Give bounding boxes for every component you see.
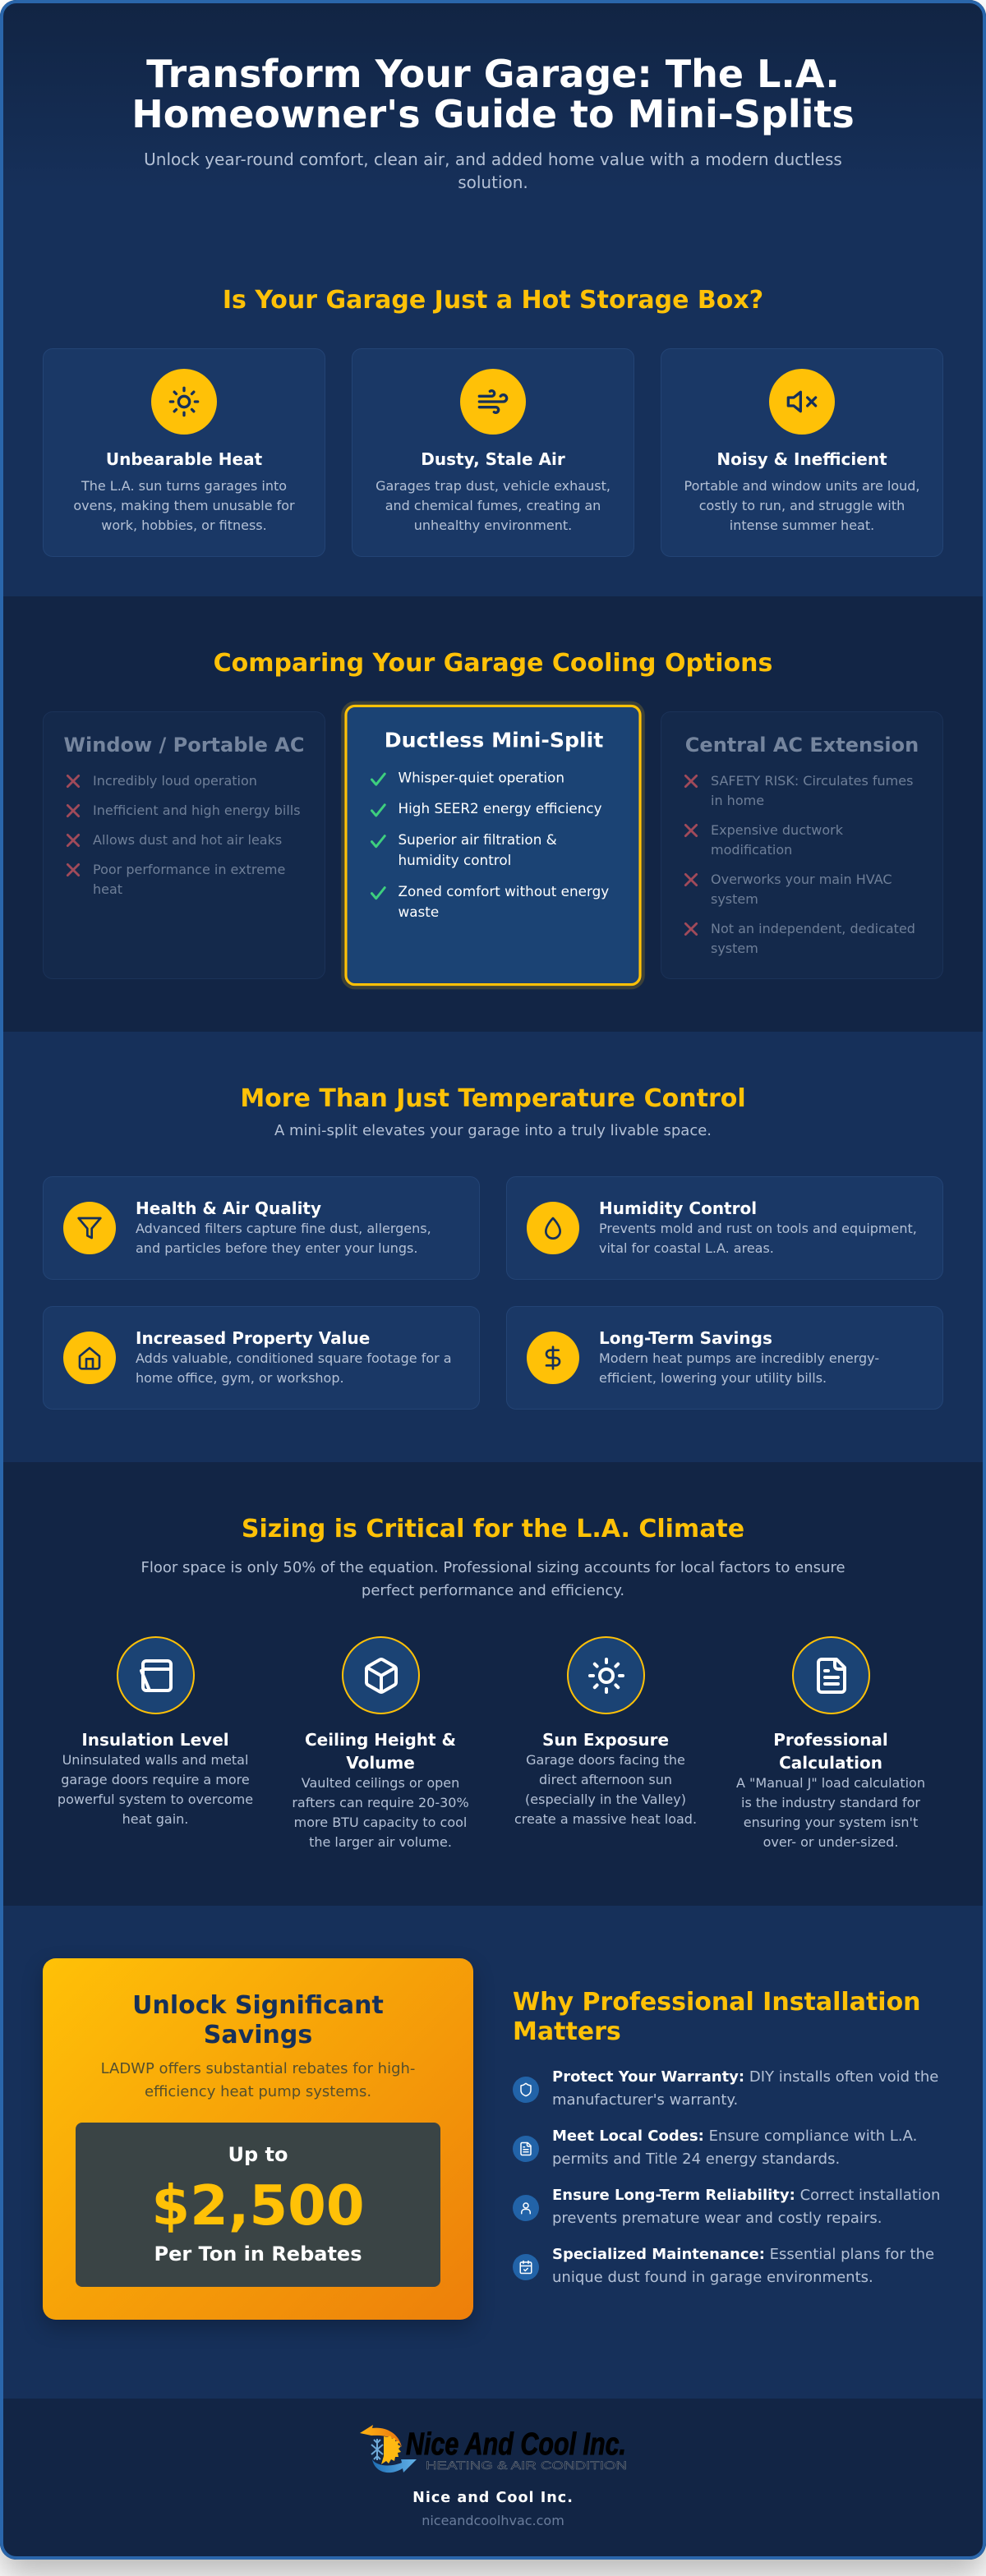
rebate amount: $2,500 bbox=[151, 2174, 365, 2238]
title: Homeowner's Guide to Mini-Splits bbox=[131, 92, 855, 136]
card text: costly to run, and struggle with bbox=[699, 498, 905, 513]
icon: insulation bbox=[117, 1636, 195, 1714]
subtitle bbox=[144, 150, 842, 192]
drawback list: Poor performance in extreme bbox=[93, 862, 285, 877]
benefit list: Whisper-quiet operation bbox=[399, 770, 564, 786]
icon: box bbox=[342, 1636, 420, 1714]
item: reliability bbox=[513, 2187, 940, 2227]
item text: Meet Local Codes: Ensure compliance with L.A. bbox=[552, 2128, 917, 2145]
card text: intense summer heat. bbox=[730, 518, 874, 533]
benefits subtitle: A mini-split elevates your garage into a truly livable space. bbox=[274, 1122, 712, 1139]
factor: professional calculation bbox=[736, 1636, 925, 1850]
card title: Unbearable Heat bbox=[106, 449, 262, 469]
card text: Portable and window units are loud, bbox=[684, 478, 920, 494]
factor text bbox=[292, 1775, 469, 1850]
logo: tagline: HEATING & AIR CONDITION bbox=[426, 2459, 627, 2472]
drawback list: Overworks your main HVAC bbox=[711, 872, 892, 887]
factor: insulation bbox=[58, 1636, 253, 1827]
sizing subtitle: perfect performance and efficiency. bbox=[362, 1582, 624, 1599]
factor title: Volume bbox=[346, 1753, 415, 1773]
factor: sun exposure bbox=[514, 1636, 697, 1827]
factor text: Vaulted ceilings or open bbox=[302, 1775, 459, 1791]
factor text: ensuring your system isn't bbox=[744, 1815, 918, 1830]
drawback list: Allows dust and hot air leaks bbox=[93, 832, 282, 848]
rebate amount box bbox=[76, 2123, 440, 2287]
icon: shield bbox=[513, 2077, 539, 2103]
drawback list: SAFETY RISK: Circulates fumes bbox=[711, 773, 913, 789]
factor text bbox=[736, 1775, 925, 1850]
drawback list: Inefficient and high energy bills bbox=[93, 803, 301, 818]
factor text: create a massive heat load. bbox=[514, 1811, 697, 1827]
company name: Nice and Cool Inc. bbox=[412, 2490, 574, 2506]
sizing subtitle: Floor space is only 50% of the equation. Professional sizing accounts for local factors to ensure bbox=[141, 1559, 845, 1576]
option: central AC extension bbox=[661, 711, 943, 979]
card text: unhealthy environment. bbox=[414, 518, 572, 533]
option title: Ductless Mini-Split bbox=[385, 728, 603, 752]
subtitle: solution. bbox=[458, 172, 528, 192]
drawback list bbox=[66, 773, 301, 897]
factor text: is the industry standard for bbox=[741, 1795, 920, 1810]
drawback list: Not an independent, dedicated bbox=[711, 921, 915, 936]
logo: blue arrow bbox=[372, 2459, 417, 2472]
item text: prevents premature wear and costly repairs. bbox=[552, 2210, 882, 2227]
card: dusty air bbox=[352, 348, 634, 557]
card title: Noisy & Inefficient bbox=[716, 449, 887, 469]
drawback list: heat bbox=[93, 881, 122, 897]
benefit: humidity control bbox=[506, 1176, 943, 1280]
benefit list bbox=[370, 770, 609, 920]
benefit text: home office, gym, or workshop. bbox=[136, 1370, 344, 1386]
icon: document bbox=[513, 2136, 539, 2162]
panel: comparison bbox=[0, 596, 986, 1032]
item text bbox=[552, 2068, 938, 2109]
item text: unique dust found in garage environments. bbox=[552, 2269, 873, 2286]
benefit title: Health & Air Quality bbox=[136, 1198, 321, 1218]
factor text: Uninsulated walls and metal bbox=[62, 1752, 248, 1768]
rebate text: efficiency heat pump systems. bbox=[145, 2083, 371, 2100]
benefit title: Increased Property Value bbox=[136, 1328, 370, 1348]
icon: person bbox=[513, 2195, 539, 2221]
factor: ceiling height bbox=[292, 1636, 469, 1850]
item text bbox=[552, 2187, 940, 2227]
item text: Ensure Long-Term Reliability: Correct installation bbox=[552, 2187, 940, 2204]
item text bbox=[552, 2128, 917, 2168]
benefit text: vital for coastal L.A. areas. bbox=[599, 1240, 774, 1256]
heading: installation: Why Professional Installation bbox=[513, 1988, 921, 2017]
drawback list bbox=[684, 773, 915, 956]
benefit text: Adds valuable, conditioned square footage for a bbox=[136, 1350, 452, 1366]
rebate text bbox=[101, 2060, 415, 2100]
benefit list: humidity control bbox=[399, 852, 511, 868]
card: noisy units bbox=[661, 348, 943, 557]
icon: house bbox=[63, 1332, 116, 1384]
factor title: Sun Exposure bbox=[542, 1730, 669, 1750]
card text: work, hobbies, or fitness. bbox=[101, 518, 267, 533]
rebate heading: Savings bbox=[204, 2021, 312, 2049]
company logo bbox=[360, 2425, 627, 2472]
benefit text: and particles before they enter your lungs. bbox=[136, 1240, 417, 1256]
factor text: direct afternoon sun bbox=[539, 1772, 672, 1787]
option title: Central AC Extension bbox=[685, 734, 919, 757]
panel: benefits bbox=[0, 1032, 986, 1462]
item text: Protect Your Warranty: DIY installs often void the bbox=[552, 2068, 938, 2086]
item text bbox=[552, 2246, 934, 2286]
item: maintenance bbox=[513, 2246, 934, 2286]
rebate card bbox=[43, 1958, 473, 2320]
benefit list: Superior air filtration & bbox=[399, 831, 557, 848]
benefit text bbox=[599, 1350, 879, 1386]
benefit text: Prevents mold and rust on tools and equipment, bbox=[599, 1221, 917, 1236]
benefit list: waste bbox=[399, 904, 439, 920]
heading: comparison: Comparing Your Garage Cooling Options bbox=[214, 649, 772, 678]
benefit text: efficient, lowering your utility bills. bbox=[599, 1370, 827, 1386]
rebate heading: Unlock Significant bbox=[132, 1991, 384, 2020]
benefit text: Modern heat pumps are incredibly energy- bbox=[599, 1350, 879, 1366]
benefit: property value bbox=[43, 1306, 480, 1410]
item: warranty bbox=[513, 2068, 938, 2109]
benefit list: High SEER2 energy efficiency bbox=[399, 800, 602, 816]
factor text: more BTU capacity to cool bbox=[294, 1815, 467, 1830]
factor text bbox=[58, 1752, 253, 1827]
item text: permits and Title 24 energy standards. bbox=[552, 2150, 840, 2168]
benefit text: Advanced filters capture fine dust, allergens, bbox=[136, 1221, 431, 1236]
rebate text: LADWP offers substantial rebates for high- bbox=[101, 2060, 415, 2077]
benefit text bbox=[136, 1221, 431, 1256]
factor text: the larger air volume. bbox=[309, 1834, 452, 1850]
factor title: Calculation bbox=[779, 1753, 882, 1773]
drawback list: Incredibly loud operation bbox=[93, 773, 257, 789]
item text: Specialized Maintenance: Essential plans for the bbox=[552, 2246, 934, 2263]
card: unbearable heat bbox=[43, 348, 325, 557]
why install column bbox=[513, 1988, 940, 2286]
benefit list: Zoned comfort without energy bbox=[399, 883, 609, 899]
factor text: powerful system to overcome bbox=[58, 1792, 253, 1807]
drawback list: system bbox=[711, 891, 758, 907]
drawback list: system bbox=[711, 941, 758, 956]
factor text: A "Manual J" load calculation bbox=[736, 1775, 925, 1791]
card text bbox=[73, 478, 295, 533]
panel: rebates and installation bbox=[0, 1906, 986, 2399]
up to label: Up to bbox=[228, 2143, 288, 2166]
benefit text bbox=[136, 1350, 452, 1386]
item: local codes bbox=[513, 2128, 917, 2168]
heading: installation bbox=[513, 1988, 921, 2046]
benefit title: Humidity Control bbox=[599, 1198, 757, 1218]
benefit: health and air quality bbox=[43, 1176, 480, 1280]
logo: orange arrow bbox=[360, 2425, 402, 2447]
title bbox=[131, 52, 855, 136]
factor title bbox=[773, 1730, 888, 1773]
icon: calendar check bbox=[513, 2254, 539, 2280]
benefit text bbox=[599, 1221, 917, 1256]
factor text bbox=[514, 1752, 697, 1827]
heading: installation: Matters bbox=[513, 2017, 621, 2046]
icon: droplet bbox=[527, 1202, 579, 1254]
factor text: Garage doors facing the bbox=[526, 1752, 685, 1768]
benefit title: Long-Term Savings bbox=[599, 1328, 772, 1348]
icon: dollar bbox=[527, 1332, 579, 1384]
logo: snowflake bbox=[371, 2439, 383, 2460]
title: Transform Your Garage: The L.A. bbox=[146, 52, 840, 96]
benefit: long-term savings bbox=[506, 1306, 943, 1410]
card text bbox=[376, 478, 610, 533]
card text: ovens, making them unusable for bbox=[73, 498, 295, 513]
factor text: over- or under-sized. bbox=[763, 1834, 898, 1850]
icon: filter bbox=[63, 1202, 116, 1254]
factor title bbox=[305, 1730, 456, 1773]
factor text: (especially in the Valley) bbox=[525, 1792, 686, 1807]
factor title: Professional bbox=[773, 1730, 888, 1750]
factor title: Insulation Level bbox=[81, 1730, 229, 1750]
heading: benefits: More Than Just Temperature Control bbox=[240, 1084, 746, 1113]
sizing subtitle bbox=[141, 1559, 845, 1599]
logo: sun bbox=[381, 2436, 401, 2464]
heading: problems: Is Your Garage Just a Hot Storage Box? bbox=[223, 286, 763, 315]
panel: sizing factors bbox=[0, 1462, 986, 1906]
subtitle: Unlock year-round comfort, clean air, and added home value with a modern ductless bbox=[144, 150, 842, 169]
factor text: heat gain. bbox=[122, 1811, 188, 1827]
icon: muted speaker bbox=[769, 369, 835, 435]
factor text: rafters can require 20-30% bbox=[292, 1795, 469, 1810]
card text: The L.A. sun turns garages into bbox=[81, 478, 287, 494]
company website: niceandcoolhvac.com bbox=[422, 2513, 564, 2528]
card text bbox=[684, 478, 920, 533]
factor text: garage doors require a more bbox=[61, 1772, 250, 1787]
icon: document bbox=[792, 1636, 870, 1714]
option title: Window / Portable AC bbox=[64, 734, 304, 757]
per ton label: Per Ton in Rebates bbox=[154, 2242, 362, 2266]
drawback list: in home bbox=[711, 793, 764, 808]
card title: Dusty, Stale Air bbox=[421, 449, 565, 469]
drawback list: Expensive ductwork bbox=[711, 822, 843, 838]
icon: wind bbox=[460, 369, 526, 435]
icon: sun bbox=[567, 1636, 645, 1714]
icon: sun bbox=[151, 369, 217, 435]
card text: and chemical fumes, creating an bbox=[385, 498, 601, 513]
option: window portable AC bbox=[43, 711, 325, 979]
drawback list: modification bbox=[711, 842, 792, 858]
card text: Garages trap dust, vehicle exhaust, bbox=[376, 478, 610, 494]
rebate heading bbox=[132, 1991, 384, 2049]
item text: manufacturer's warranty. bbox=[552, 2091, 738, 2109]
panel: footer bbox=[0, 2399, 986, 2560]
heading: sizing: Sizing is Critical for the L.A. Climate bbox=[242, 1515, 744, 1543]
panel: hero and problems bbox=[0, 0, 986, 596]
factor title: Ceiling Height & bbox=[305, 1730, 456, 1750]
option: ductless mini-split highlighted bbox=[344, 705, 642, 986]
